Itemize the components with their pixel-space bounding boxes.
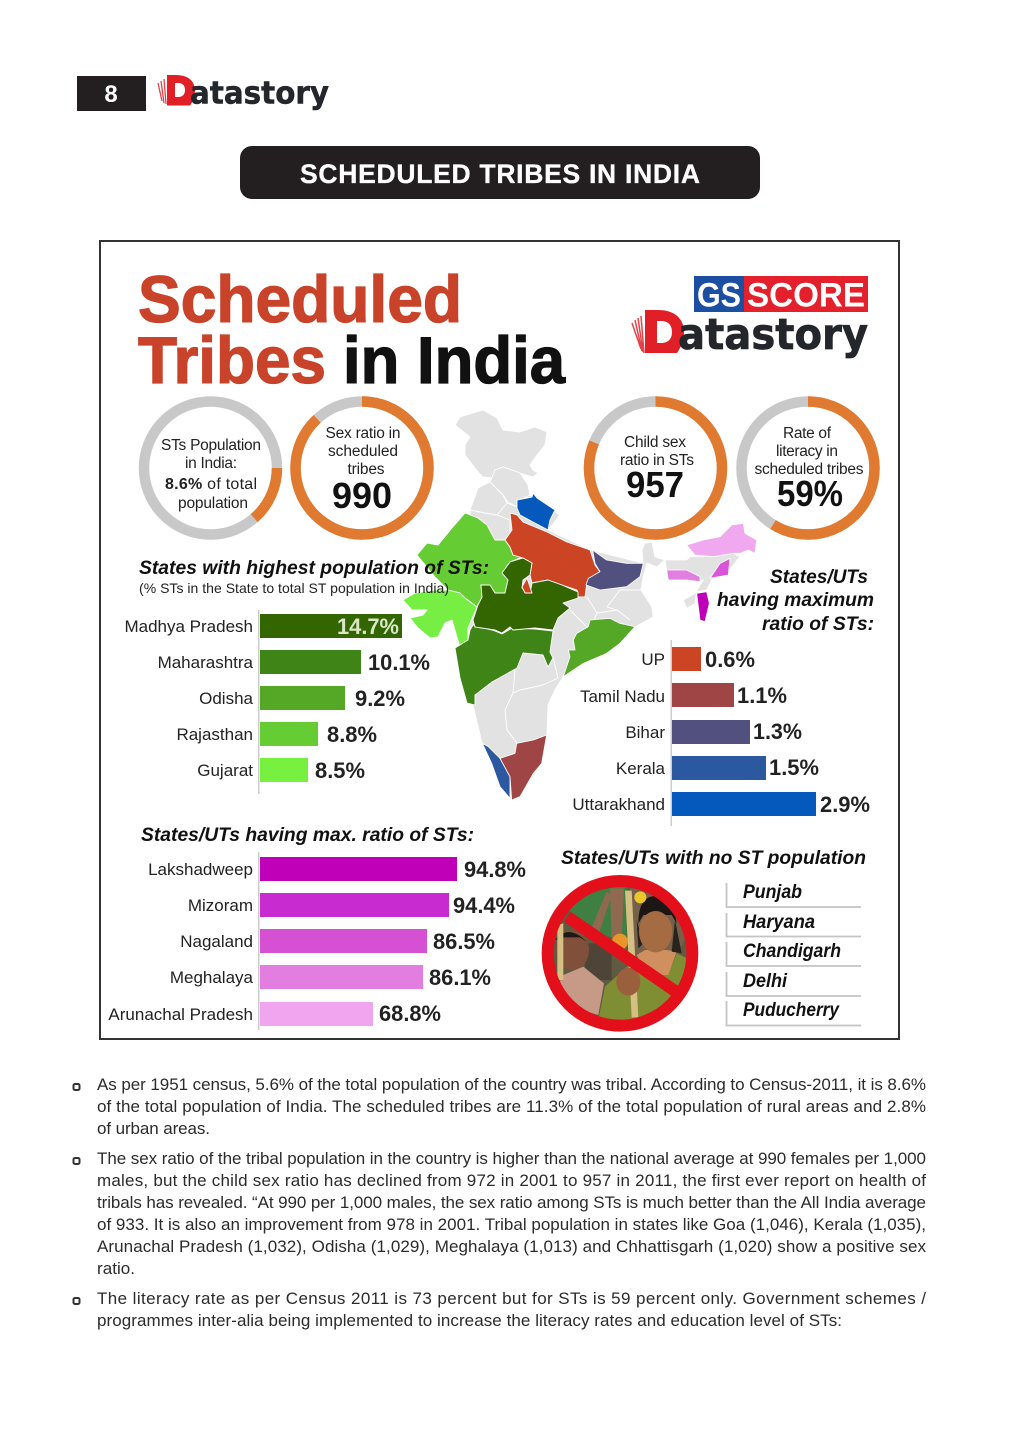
map: Maharashtra	[455, 625, 553, 705]
text block: bullet 1: As per 1951 census, 5.6% of the total population of the country was tribal. According to Census-2011, it is 8.6%	[97, 1075, 926, 1094]
bar chart: highest population: 8.5%	[315, 758, 365, 783]
text block: bullet 2: ratio.	[97, 1259, 135, 1278]
text block: bullet 3: The literacy rate as per Census 2011 is 73 percent but for STs is 59 percent only. Government schemes /	[97, 1289, 926, 1308]
page number: 8	[104, 81, 118, 108]
bar chart: lowest ratio states: 2.9%	[820, 792, 870, 817]
map: mainland base	[460, 467, 665, 800]
donut: ST population: in India:	[185, 455, 237, 472]
list: states with no ST population: Puducherry	[743, 1000, 840, 1021]
text block: bullet 2	[74, 1149, 926, 1278]
map: eastern states	[482, 523, 757, 800]
bar chart: lowest ratio states: 1.5%	[769, 755, 819, 780]
map: Rajasthan	[417, 513, 522, 607]
bar chart: max ratio: Lakshadweep	[148, 860, 253, 879]
logo: GS Score Datastory: atastory	[678, 310, 868, 360]
bar chart: max ratio: Arunachal Pradesh	[108, 1005, 253, 1024]
bar chart: highest population: Odisha	[199, 689, 254, 708]
map: Uttar Pradesh	[505, 513, 600, 597]
heading: no ST population: States/UTs with no ST population	[561, 847, 866, 869]
map: Uttar Pradesh enclave	[522, 578, 532, 593]
bar chart: highest population: 9.2%	[355, 686, 405, 711]
map: Punjab	[470, 482, 507, 515]
logo: GS Score Datastory	[632, 276, 868, 360]
donut: literacy: scheduled tribes	[754, 461, 864, 478]
text block: bullet 2: tribals has revealed. “At 990 per 1,000 males, the sex ratio among STs is much better than the All India average	[97, 1193, 926, 1212]
heading: highest population: (% STs in the State to total ST population in India)	[139, 580, 449, 596]
donut: ST population: population	[178, 495, 248, 512]
donut: literacy: literacy in	[776, 443, 838, 460]
bar chart: lowest ratio states: 1.1%	[737, 683, 787, 708]
infographic title: Scheduled	[138, 262, 462, 336]
donut: literacy	[742, 402, 874, 534]
bar chart: highest population: 8.8%	[327, 722, 377, 747]
bar chart: max ratio: 94.8%	[464, 857, 526, 882]
logo: GS Score Datastory: SCORE	[747, 276, 865, 314]
bar chart: lowest ratio states: Kerala	[616, 759, 666, 778]
text block: bullet 2: Arunachal Pradesh (1,032), Odisha (1,029), Meghalaya (1,013) and Chhattisgarh (1,020) show a positive sex	[97, 1237, 926, 1256]
list: states with no ST population: Haryana	[743, 912, 815, 933]
map: Madhya Pradesh	[473, 558, 578, 633]
text block: bullet 1: of the total population of India. The scheduled tribes are 11.3% of the total population of rural areas and 2.8%	[97, 1097, 926, 1116]
bar chart: max ratio: 68.8%	[379, 1001, 441, 1026]
icon: no-sign over tribal photo	[543, 877, 697, 1030]
heading: highest population	[139, 557, 489, 596]
list: states with no ST population	[726, 882, 861, 1026]
bar chart: lowest ratio states: Uttarakhand	[572, 795, 665, 814]
list: states with no ST population: Punjab	[743, 882, 802, 903]
title banner: SCHEDULED TRIBES IN INDIA	[300, 159, 700, 189]
map: Jammu and Kashmir	[455, 410, 547, 478]
donut: child sex ratio: 957	[626, 464, 684, 505]
bar chart: highest population: Madhya Pradesh	[124, 617, 253, 636]
bar chart: max ratio: Mizoram	[188, 896, 253, 915]
bar chart: max ratio: 86.5%	[433, 929, 495, 954]
bar chart: lowest ratio states: UP	[641, 650, 665, 669]
bar chart: highest population: 14.7%	[337, 614, 399, 639]
map: Himachal Pradesh	[490, 467, 530, 507]
map: southern state borders	[497, 503, 641, 743]
donut: ST population: 8.6% of total	[165, 476, 257, 493]
heading: highest population: States with highest population of STs:	[139, 557, 489, 579]
bar chart: lowest ratio states	[572, 640, 870, 826]
heading: max ratio: States/UTs having max. ratio of STs:	[141, 824, 474, 846]
infographic panel	[100, 241, 899, 1039]
bar chart: max ratio: Meghalaya	[170, 968, 254, 987]
text block: bullet 3: programmes inter-alia being implemented to increase the literacy rates and education level of STs:	[97, 1311, 842, 1330]
logo: GS Score Datastory: GS	[697, 276, 741, 314]
infographic title: Tribes	[138, 323, 326, 397]
donut: ST population: STs Population	[161, 437, 261, 454]
bar chart: lowest ratio states: Bihar	[625, 723, 665, 742]
donut: child sex ratio: ratio in STs	[620, 452, 694, 469]
donut: literacy: Rate of	[783, 425, 832, 442]
heading: maximum ratio right: States/UTs	[770, 566, 868, 588]
donut: sex ratio: 990	[332, 475, 392, 516]
text block: bullet 2: The sex ratio of the tribal population in the country is higher than the national average at 990 females per 1,000	[97, 1149, 926, 1168]
bar chart: highest population: Rajasthan	[176, 725, 253, 744]
bar chart: highest population: Gujarat	[197, 761, 253, 780]
bar chart: max ratio: 86.1%	[429, 965, 491, 990]
text block: bullet 1: of urban areas.	[97, 1119, 210, 1138]
map of India	[403, 410, 757, 800]
donut: child sex ratio	[589, 402, 722, 534]
infographic title: in India	[343, 323, 566, 397]
bar chart: lowest ratio states: 1.3%	[753, 719, 802, 744]
map: Uttarakhand	[517, 493, 555, 530]
heading: maximum ratio right: having maximum	[717, 589, 874, 611]
donut: child sex ratio: Child sex	[624, 434, 686, 451]
bar chart: lowest ratio states: 0.6%	[705, 647, 755, 672]
list: states with no ST population: Chandigarh	[743, 941, 841, 962]
bar chart: highest population: Maharashtra	[158, 653, 254, 672]
bar chart: max ratio	[108, 852, 526, 1030]
page number	[77, 76, 146, 111]
heading: maximum ratio right: ratio of STs:	[762, 613, 874, 635]
infographic title	[138, 262, 566, 397]
bar chart: highest population: 10.1%	[368, 650, 430, 675]
text block: bullet 1	[74, 1075, 926, 1138]
donut: sex ratio	[296, 402, 428, 534]
heading: maximum ratio right	[717, 566, 874, 635]
bar chart: max ratio: Nagaland	[180, 932, 253, 951]
donut: sex ratio: scheduled	[328, 443, 398, 460]
donut: ST population	[144, 402, 277, 534]
donut: literacy: 59%	[777, 473, 843, 514]
title banner	[240, 146, 760, 199]
bar chart: max ratio: 94.4%	[453, 893, 515, 918]
donut: sex ratio: Sex ratio in	[326, 425, 400, 442]
donut: sex ratio: tribes	[348, 461, 385, 478]
bar chart: highest population	[124, 610, 430, 794]
logo: Datastory header: atastory	[190, 76, 329, 112]
text block: bullet 2: of 933. It is also an improvement from 978 in 2001. Tribal population in states like Goa (1,046), Kerala (1,035),	[97, 1215, 926, 1234]
map: Gujarat	[403, 590, 477, 647]
text block: bullet 3	[74, 1289, 926, 1330]
bar chart: lowest ratio states: Tamil Nadu	[580, 687, 665, 706]
text block: bullet 2: males, but the child sex ratio has declined from 972 in 2001 to 957 in 2011, the first ever report on health of	[97, 1171, 926, 1190]
list: states with no ST population: Delhi	[743, 971, 788, 992]
